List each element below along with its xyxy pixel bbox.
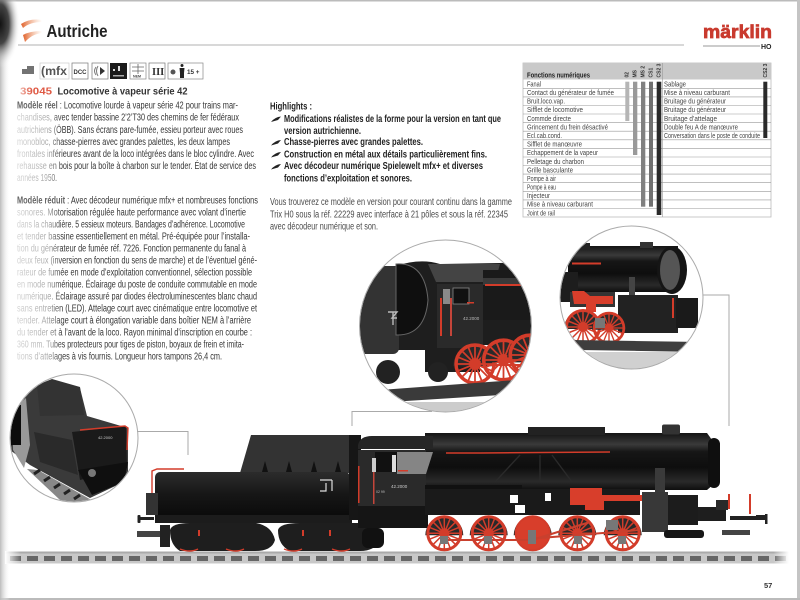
running gear <box>425 488 768 538</box>
function names, left column: Commde directe <box>527 114 571 123</box>
text block: modèle réduit: et tender bassine essentiellement en métal. Pré-équipée pour l’installa- <box>17 232 250 242</box>
text block: modèle réduit: du tender et à l’avant de la loco. Rayon minimal d’inscription en courbe : <box>17 328 252 338</box>
highlights <box>270 102 501 184</box>
function names, right column: Bruitage du générateur <box>664 97 726 106</box>
text block: modèle réduit: deux feux (inversion en fonction du sens de marche) et de l’éventuel géné- <box>17 256 257 266</box>
product number and name: 39045 <box>20 86 52 98</box>
function names, left column <box>527 80 614 217</box>
icon: NEM coupler: NEM <box>133 74 141 78</box>
function names, left column: Grincement du frein désactivé <box>527 122 608 131</box>
connector lines <box>137 295 729 455</box>
function names, left column: Sifflet de manœuvre <box>527 140 582 149</box>
icon: bullet arrows <box>271 116 281 170</box>
table: fonctions numériques: CS1 <box>648 68 654 78</box>
text block: modèle réduit: Modèle réduit : Avec décodeur numérique mfx+ et nombreuses fonctions <box>17 196 258 206</box>
text block: modèle réel <box>17 100 256 184</box>
icon: age 15+: 15 + <box>187 69 200 76</box>
cab: 42.2000 <box>391 484 408 489</box>
text block: modèle réduit: 360 mm. Tubes protecteurs pour tiges de piston, boyaux de frein et imita- <box>17 340 244 350</box>
text block: modèle réel: autrichiens (ÖBB). Sans écrans pare-fumée, essieu porteur avec roues <box>17 124 243 136</box>
logo: märklin HO: HO <box>761 44 772 51</box>
icon: DCC: DCC <box>74 69 87 76</box>
function names, left column: Pompe à eau <box>527 182 556 192</box>
function names, left column: Contact du générateur de fumée <box>527 88 614 97</box>
table: fonctions numériques: MS <box>632 69 638 78</box>
highlights: Avec décodeur numérique Spielewelt mfx+ et diverses <box>284 161 483 172</box>
function names, right column: Mise à niveau carburant <box>664 88 731 97</box>
function names, right column <box>664 80 760 140</box>
text block: Trix version: avec décodeur numérique et son. <box>270 222 378 232</box>
brand swoosh <box>21 20 42 42</box>
red driving wheels <box>425 516 642 550</box>
text block: modèle réduit: tender. Attelage court à élongation variable dans boîtier NEM à l’arrière <box>17 316 251 326</box>
detail circle: smokebox <box>560 242 698 368</box>
circle outline: smokebox <box>560 226 703 369</box>
text block: modèle réduit: tion du générateur de fumée réf. 7226. Fonction permanente du fanal à <box>17 244 246 254</box>
text block: modèle réduit: en mode numérique. Éclairage du poste de conduite commutable en mode <box>17 278 257 290</box>
icon: epoch III <box>149 63 165 79</box>
icon: lighting <box>110 63 127 79</box>
text block: modèle réduit <box>17 196 258 362</box>
text block: modèle réel: chandises, avec tender bassine 2’2’T30 des chemins de fer fédéraux <box>17 112 239 124</box>
text block: modèle réel: frontales inférieures avant de la loco intégrées dans le bloc cylindre. Avec <box>17 149 254 160</box>
icon: epoch III: III <box>152 67 164 78</box>
function bars <box>625 82 767 215</box>
table: fonctions numériques: CS2 3 <box>763 63 769 78</box>
page number: 57 <box>764 581 772 590</box>
icon: mfx: (mfx <box>41 64 67 78</box>
function names, left column: Ecl.cab.cond. <box>527 131 562 140</box>
icon: sound <box>92 63 108 79</box>
text block: modèle réduit: dans la chaudière. 5 essieux moteurs. Bandages d’adhérence. Locomotive <box>17 220 245 230</box>
function names, left column: Echappement de la vapeur <box>527 148 598 157</box>
text block: Trix version <box>270 197 512 232</box>
function names, left column: Bruit.loco.vap. <box>527 97 565 106</box>
cab <box>358 436 522 548</box>
tender <box>137 435 380 551</box>
text block: modèle réduit: numérique. Éclairage assuré par diodes électroluminescentes blanc chaud <box>17 290 257 302</box>
function names, left column: Pelletage du charbon <box>527 157 584 166</box>
highlights: Construction en métal aux détails particulièrement fins. <box>284 150 487 160</box>
function names, left column: Mise à niveau carburant <box>527 200 594 209</box>
highlights: fonctions d’exploitation et sonores. <box>284 174 412 184</box>
text block: modèle réel: années 1950. <box>17 173 57 184</box>
highlights: Modifications réalistes de la forme pour la version en tant que <box>284 114 501 125</box>
text block: modèle réduit: sonores. Motorisation régulée haute performance avec volant d’inertie <box>17 208 246 218</box>
table: fonctions numériques: 02 <box>624 72 630 78</box>
icon: locomotive <box>22 66 34 74</box>
function names, left column: Joint de rail <box>527 208 555 217</box>
table: fonctions numériques <box>523 63 771 217</box>
table: fonctions numériques: Fonctions numériques <box>527 72 590 80</box>
icon row <box>22 63 203 79</box>
table: fonctions numériques: MS 2 <box>640 66 646 78</box>
function names, left column: Pompe à air <box>527 174 556 183</box>
function names, left column: Fanal <box>527 80 541 88</box>
function names, left column: Grille basculante <box>527 165 573 174</box>
function names, left column: Injecteur <box>527 191 550 200</box>
text block: modèle réel: Modèle réel : Locomotive lourde à vapeur série 42 pour trains mar- <box>17 100 238 112</box>
track <box>5 551 789 564</box>
function names, right column: Sablage <box>664 80 686 88</box>
function names, right column: Bruitage du générateur <box>664 105 726 114</box>
function names, right column: Bruitage d’attelage <box>664 114 717 123</box>
highlights: Highlights : <box>270 102 312 112</box>
highlights: Chasse-pierres avec grandes palettes. <box>284 137 423 148</box>
circle outline: cab <box>360 240 532 412</box>
icon: DCC <box>72 63 88 79</box>
text block: modèle réel: monobloc, chasse-pierres avec grandes palettes, les deux lampes <box>17 137 230 148</box>
text block: modèle réduit: tions d’attelages à vis fournis. Longueur hors tampons 26,4 cm. <box>17 352 222 362</box>
locomotive model <box>137 424 768 551</box>
text block: modèle réduit: sans entretien (LED). Attelage court avec cinématique entre locomotive et <box>17 304 257 314</box>
text block: Trix version: Vous trouverez ce modèle en version pour courant continu dans la gamme <box>270 197 512 208</box>
table: fonctions numériques: CS2 3 <box>656 63 662 78</box>
icon: NEM coupler <box>130 63 146 79</box>
boiler <box>349 424 720 520</box>
text block: modèle réduit: rateur de fumée en mode d’exploitation conventionnel, sélection possible <box>17 268 252 278</box>
function names, left column: Sifflet de locomotive <box>527 105 583 114</box>
title: Autriche: Autriche <box>46 21 108 41</box>
logo: märklin HO <box>703 22 772 51</box>
icon: age 15+ <box>168 63 203 79</box>
detail circle: cab: 42.2000 <box>463 316 480 321</box>
function names, right column: Conversation dans le poste de conduite <box>664 131 760 140</box>
detail circle: tender rear <box>10 379 129 502</box>
highlights: version autrichienne. <box>284 126 361 137</box>
detail circle: tender rear: 42.2000 <box>98 435 113 440</box>
text block: modèle réel: rehausse en bois pour la boîte à charbon sur le tender. État de service des <box>17 159 256 172</box>
text block: Trix version: Trix H0 sous la réf. 22229 avec interface à 21 pôles et sous la réf. 22345 <box>270 210 508 220</box>
logo: märklin HO: märklin <box>703 22 772 42</box>
function names, right column: Double feu A de manœuvre <box>664 122 738 131</box>
product number and name: Locomotive à vapeur série 42 <box>58 86 188 98</box>
detail circle: cab <box>360 261 531 412</box>
circle outline: tender rear <box>10 374 138 502</box>
cab: 02 99 <box>376 490 385 494</box>
